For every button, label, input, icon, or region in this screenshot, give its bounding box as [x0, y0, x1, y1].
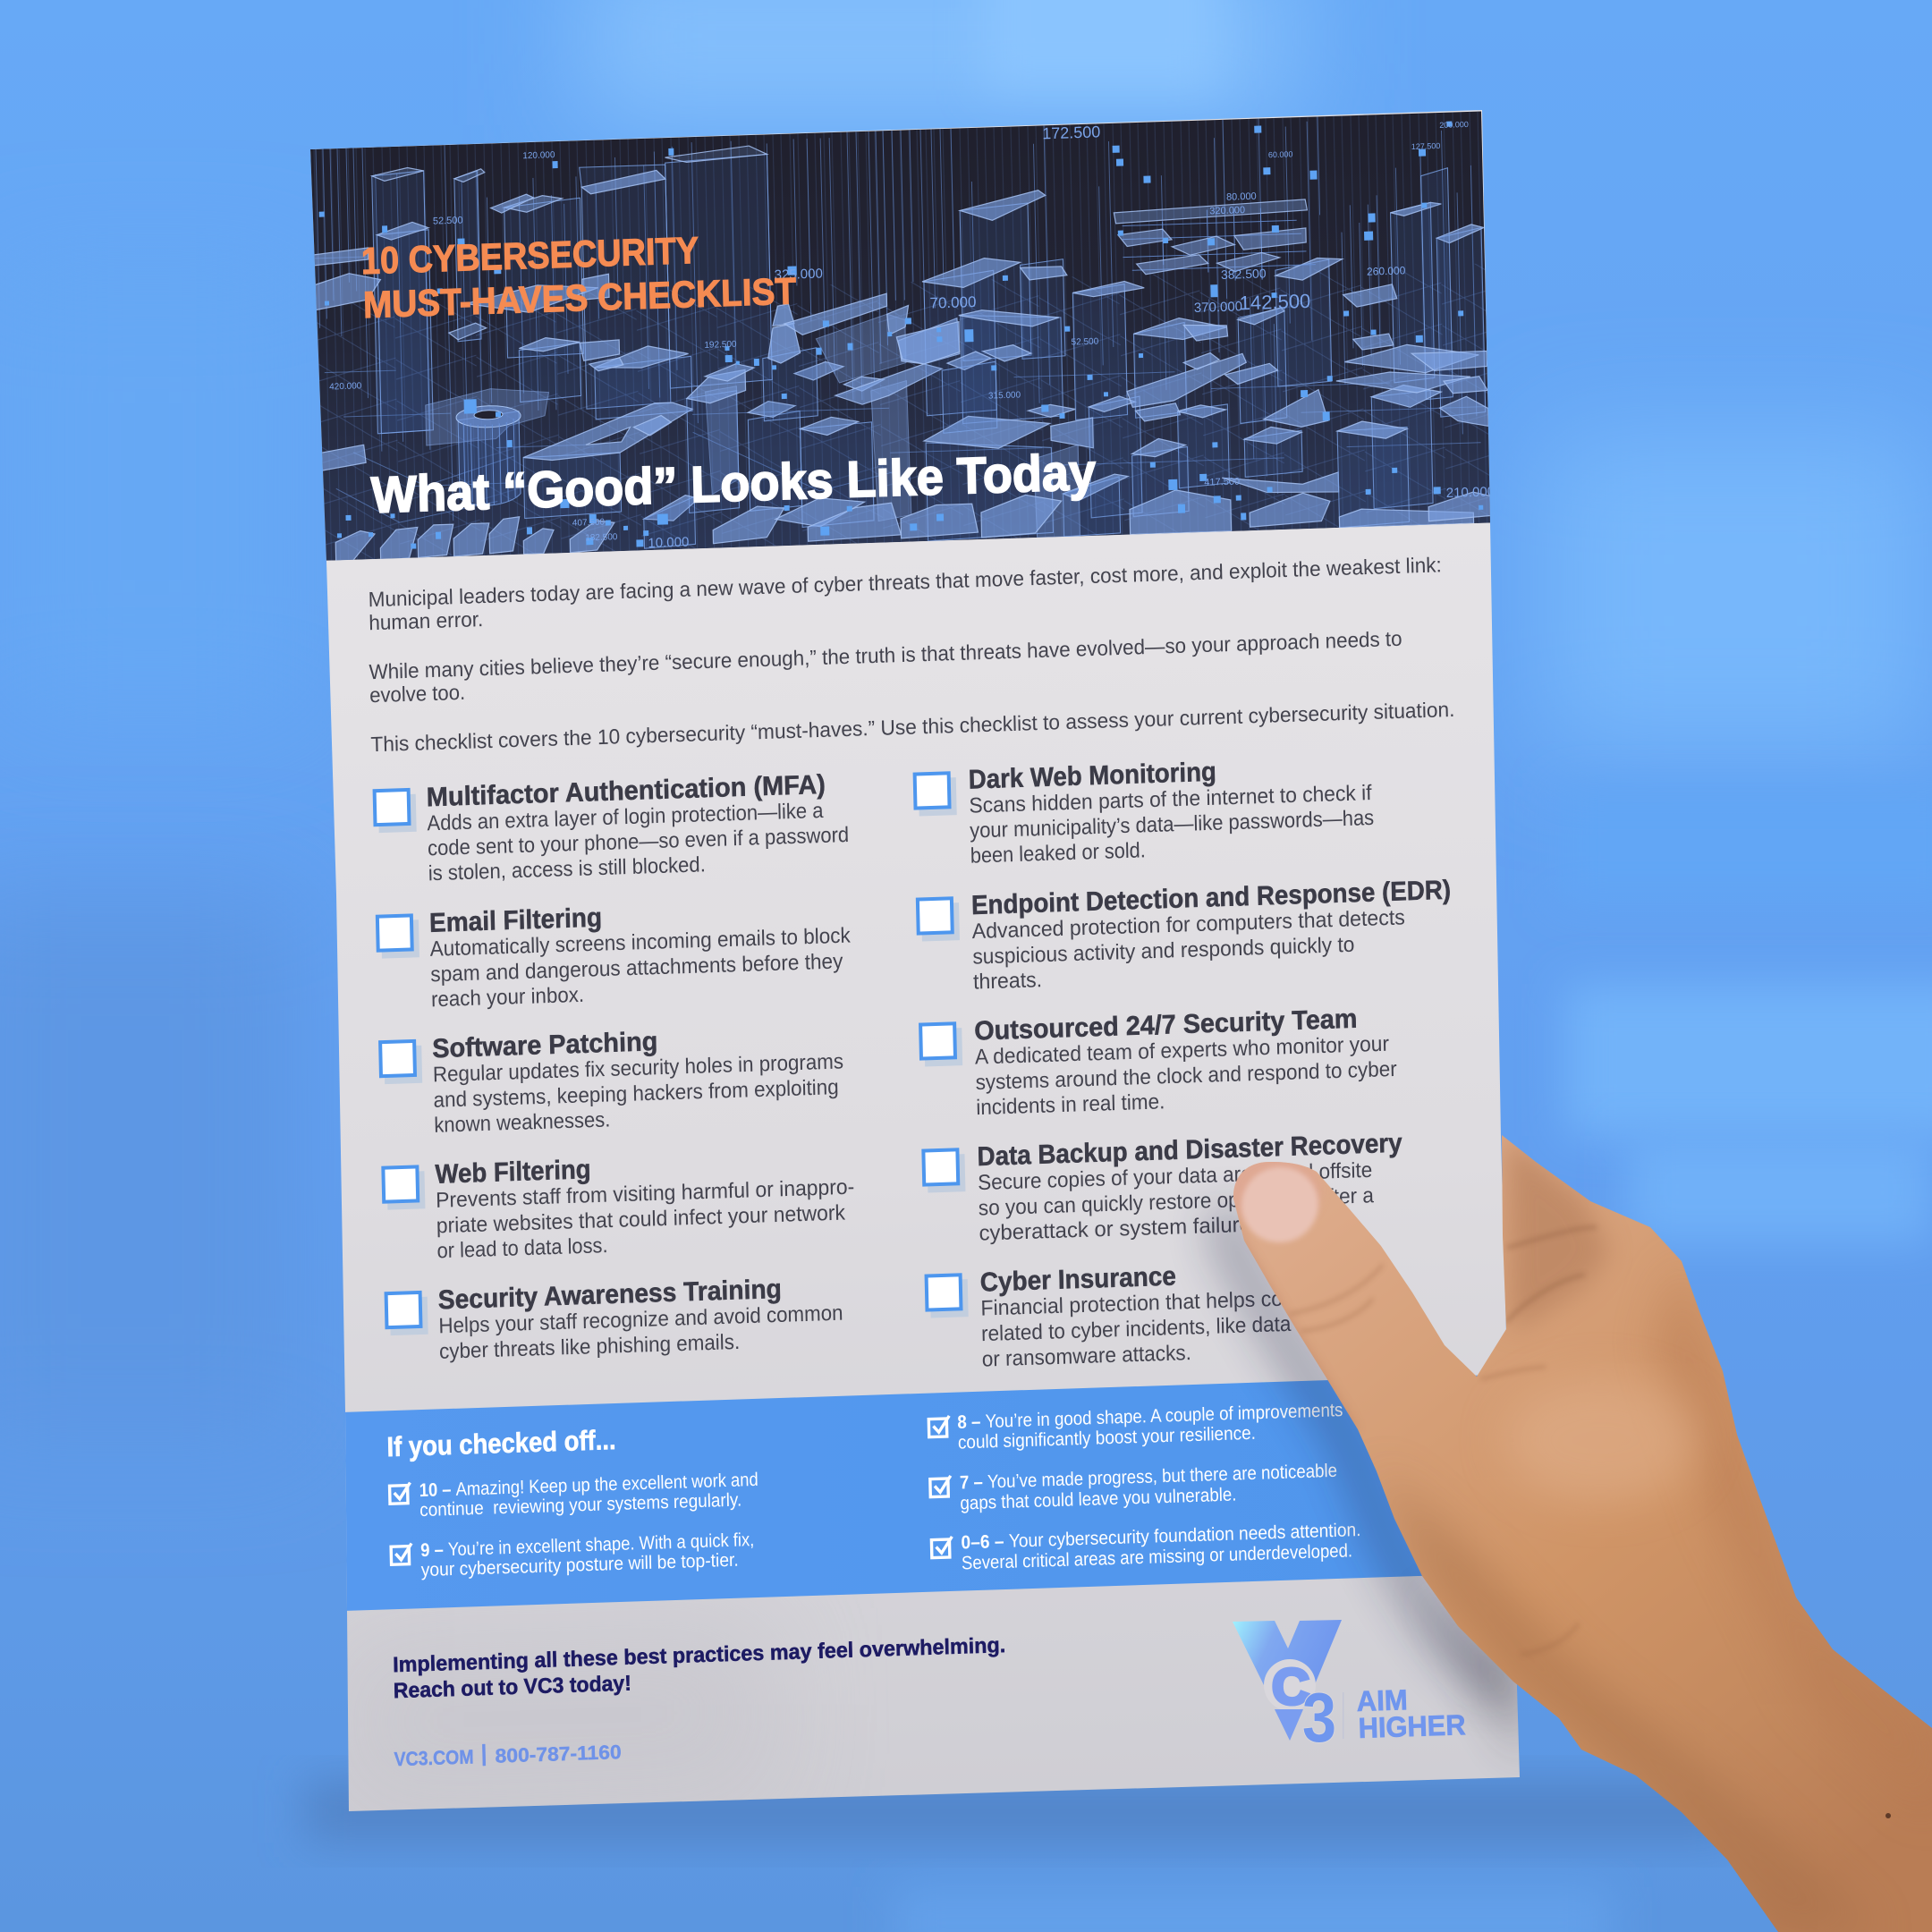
- numeric labels in the image: 382.500: [1221, 266, 1267, 282]
- checklist item: dark web monitoring: been leaked or sold.: [970, 838, 1146, 869]
- numeric labels in the image: 420.000: [329, 381, 362, 393]
- checklist item: MFA: Multifactor Authentication (MFA): [426, 770, 826, 812]
- heading: 10 cybersecurity must-haves checklist: 10 CYBERSECURITY: [360, 229, 699, 282]
- numeric labels in the image: 120.000: [522, 150, 555, 161]
- data points scattered across the image: [318, 119, 1484, 557]
- hand holding the paper: [1227, 1135, 1932, 1932]
- checklist item: data backup and disaster recovery: Secure copies of your data are stored offsite: [978, 1158, 1373, 1195]
- call to action: [393, 1633, 1006, 1703]
- mole: [1885, 1813, 1891, 1818]
- numeric labels in the image: 192.500: [704, 340, 737, 351]
- numeric labels in the image: 182.500: [585, 532, 618, 543]
- checklist item: security awareness training: Security Awareness Training: [437, 1275, 782, 1315]
- heading: 10 cybersecurity must-haves checklist: [363, 236, 796, 318]
- right-side lower blocks: [896, 304, 1491, 542]
- checklist item: outsourced security team: A dedicated team of experts who monitor your: [975, 1032, 1389, 1070]
- checklist item: EDR: [918, 876, 1453, 996]
- thumbnail: [1227, 1152, 1320, 1227]
- checklist item: MFA: [374, 769, 850, 887]
- logo: VC3 Aim Higher: 3: [1302, 1678, 1336, 1757]
- numeric labels in the image: 52.500: [1071, 337, 1099, 348]
- checklist item: outsourced security team: [920, 1003, 1398, 1122]
- checklist item: cyber insurance: or ransomware attacks.: [981, 1341, 1191, 1372]
- numeric labels in the image: [324, 110, 1496, 562]
- checklist item: security awareness training: cyber threats like phishing emails.: [439, 1330, 740, 1364]
- score 9: [391, 1530, 755, 1581]
- score 10: [389, 1470, 758, 1521]
- checklist item: dark web monitoring: [914, 752, 1375, 870]
- checklist item: EDR: Advanced protection for computers that detects: [971, 905, 1405, 944]
- numeric labels in the image: 210.000: [1446, 484, 1495, 501]
- score 10: continue reviewing your systems regularly.: [419, 1489, 741, 1521]
- right-side upper skyline: [919, 166, 1488, 434]
- checklist item: cyber insurance: Financial protection that helps cover costs: [980, 1284, 1366, 1321]
- numeric labels in the image: 260.000: [1367, 264, 1406, 278]
- thumb shadow on the paper: [1224, 1208, 1525, 1767]
- score 8: 8 – You’re in good shape. A couple of improvements: [957, 1400, 1343, 1433]
- score 7: gaps that could leave you vulnerable.: [960, 1485, 1237, 1514]
- panel: if you checked off: [304, 1373, 1543, 1612]
- checklist item: EDR: Endpoint Detection and Response (EDR): [971, 876, 1451, 920]
- numeric labels in the image: 370.000: [1194, 299, 1242, 316]
- checklist item: security awareness training: Helps your staff recognize and avoid common: [438, 1301, 843, 1338]
- numeric labels in the image: 10.000: [648, 535, 690, 551]
- checklist item: web filtering: Prevents staff from visiting harmful or inappro-: [436, 1175, 855, 1213]
- header: wireframe city image: [275, 101, 1537, 564]
- numeric labels in the image: 52.500: [433, 216, 463, 227]
- call to action: Implementing all these best practices may feel overwhelming.: [393, 1633, 1006, 1677]
- checklist item: web filtering: [383, 1147, 856, 1265]
- checklist item: MFA: code sent to your phone—so even if a password: [428, 823, 849, 860]
- checklist item: email filtering: reach your inbox.: [431, 983, 584, 1012]
- score 0-6: [931, 1520, 1361, 1575]
- checklist item: software patching: known weaknesses.: [434, 1107, 611, 1138]
- numeric labels in the image: 142.500: [1239, 290, 1311, 314]
- logo: VC3 Aim Higher: AIM: [1356, 1683, 1408, 1717]
- checklist item: EDR: suspicious activity and responds quickly to: [972, 933, 1355, 970]
- intro text: human error.: [369, 607, 484, 634]
- score 9: your cybersecurity posture will be top-tier.: [420, 1550, 739, 1580]
- band heading: If you checked off...: [386, 1424, 616, 1462]
- checklist item: email filtering: Email Filtering: [429, 903, 602, 938]
- intro text: This checklist covers the 10 cybersecurity “must-haves.” Use this checklist to assess your current cybersecurity situation.: [370, 698, 1455, 756]
- numeric labels in the image: 417.500: [1204, 477, 1240, 488]
- checklist item: software patching: Regular updates fix security holes in programs: [433, 1049, 843, 1087]
- checklist item: dark web monitoring: your municipality’s data—like passwords—has: [970, 806, 1374, 843]
- skin creases: [1290, 1265, 1579, 1655]
- intro text: While many cities believe they’re “secure enough,” the truth is that threats have evolved—so your approach needs to: [369, 627, 1402, 683]
- checklist item: dark web monitoring: Scans hidden parts of the internet to check if: [969, 781, 1372, 818]
- checklist item: data backup and disaster recovery: Data Backup and Disaster Recovery: [977, 1129, 1402, 1172]
- mid-left buildings and cylinder plateau: [424, 333, 695, 521]
- bottom row of small blocks: [335, 492, 1490, 560]
- tower outlines and long vertical lines: [316, 112, 1479, 525]
- skin shading: [1655, 1261, 1932, 1816]
- checklist item: security awareness training: [386, 1273, 843, 1366]
- logo: VC3 Aim Higher: [1233, 1620, 1466, 1757]
- score 10: 10 – Amazing! Keep up the excellent work and: [419, 1470, 758, 1501]
- checklist item: web filtering: Web Filtering: [435, 1155, 591, 1190]
- numeric labels in the image: 320.000: [1209, 205, 1245, 216]
- score 8: could significantly boost your resilience.: [958, 1423, 1256, 1453]
- checklist item: email filtering: [377, 895, 852, 1013]
- numeric labels in the image: 200.000: [1439, 120, 1469, 130]
- intro text: Municipal leaders today are facing a new wave of cyber threats that move faster, cost more, and exploit the weakest link:: [368, 553, 1442, 611]
- logo: VC3 Aim Higher: C: [1272, 1658, 1309, 1716]
- upper-left towers: [310, 145, 774, 471]
- numeric labels in the image: 70.000: [929, 293, 977, 312]
- score 7: 7 – You’ve made progress, but there are noticeable: [960, 1461, 1337, 1494]
- score 7: [930, 1461, 1338, 1515]
- call to action: Reach out to VC3 today!: [394, 1672, 631, 1703]
- checklist item: web filtering: priate websites that could infect your network: [436, 1200, 846, 1238]
- numeric labels in the image: 325.000: [774, 267, 823, 283]
- numeric labels in the image: 172.500: [1042, 123, 1100, 142]
- paper sheet: [275, 101, 1565, 1823]
- central translucent columns and stepped tower: [684, 292, 963, 531]
- checklist item: data backup and disaster recovery: [923, 1129, 1404, 1248]
- score 0-6: 0–6 – Your cybersecurity foundation needs attention.: [961, 1520, 1361, 1554]
- checklist item: web filtering: or lead to data loss.: [436, 1233, 608, 1263]
- score 0-6: Several critical areas are missing or underdeveloped.: [962, 1540, 1352, 1574]
- checklist item: data backup and disaster recovery: cyberattack or system failure.: [979, 1213, 1258, 1246]
- checklist item: cyber insurance: Cyber Insurance: [979, 1262, 1176, 1298]
- logo: VC3 Aim Higher: HIGHER: [1358, 1708, 1466, 1744]
- checklist item: MFA: is stolen, access is still blocked.: [428, 852, 706, 886]
- score 9: 9 – You’re in excellent shape. With a quick fix,: [420, 1530, 755, 1561]
- checklist item: software patching: [380, 1021, 845, 1140]
- checklist item: outsourced security team: incidents in real time.: [976, 1089, 1165, 1120]
- numeric labels in the image: 80.000: [1226, 191, 1257, 203]
- intro text: [367, 553, 1455, 756]
- checklist item: software patching: Software Patching: [432, 1027, 658, 1063]
- contact line: VC3.COM: [394, 1745, 474, 1770]
- heading: what good looks like today: What “Good” Looks Like Today: [370, 444, 1097, 524]
- checklist item: outsourced security team: Outsourced 24/7 Security Team: [974, 1004, 1358, 1046]
- contact line: [394, 1740, 622, 1770]
- checklist item: EDR: threats.: [973, 968, 1042, 995]
- intro text: evolve too.: [369, 681, 465, 707]
- numeric labels in the image: 315.000: [988, 390, 1021, 402]
- checklist item: email filtering: spam and dangerous attachments before they: [430, 949, 843, 987]
- checklist item: cyber insurance: [926, 1255, 1380, 1374]
- checklist item: cyber insurance: related to cyber incidents, like data breaches: [981, 1309, 1379, 1346]
- numeric labels in the image: 127.500: [1411, 141, 1441, 151]
- checklist item: MFA: Adds an extra layer of login protection—like a: [427, 799, 824, 835]
- checklist item: email filtering: Automatically screens incoming emails to block: [429, 924, 852, 962]
- checklist item: dark web monitoring: Dark Web Monitoring: [968, 758, 1216, 795]
- checklist item: software patching: and systems, keeping hackers from exploiting: [433, 1075, 839, 1113]
- heading: 10 cybersecurity must-haves checklist: MUST-HAVES CHECKLIST: [363, 269, 797, 326]
- contact line: 800-787-1160: [495, 1741, 622, 1767]
- numeric labels in the image: 407.500: [572, 518, 606, 529]
- numeric labels in the image: 60.000: [1268, 149, 1293, 159]
- checklist item: data backup and disaster recovery: so you can quickly restore operations after a: [979, 1183, 1375, 1221]
- checklist item: outsourced security team: systems around the clock and respond to cyber: [975, 1057, 1397, 1095]
- score 8: [928, 1400, 1343, 1454]
